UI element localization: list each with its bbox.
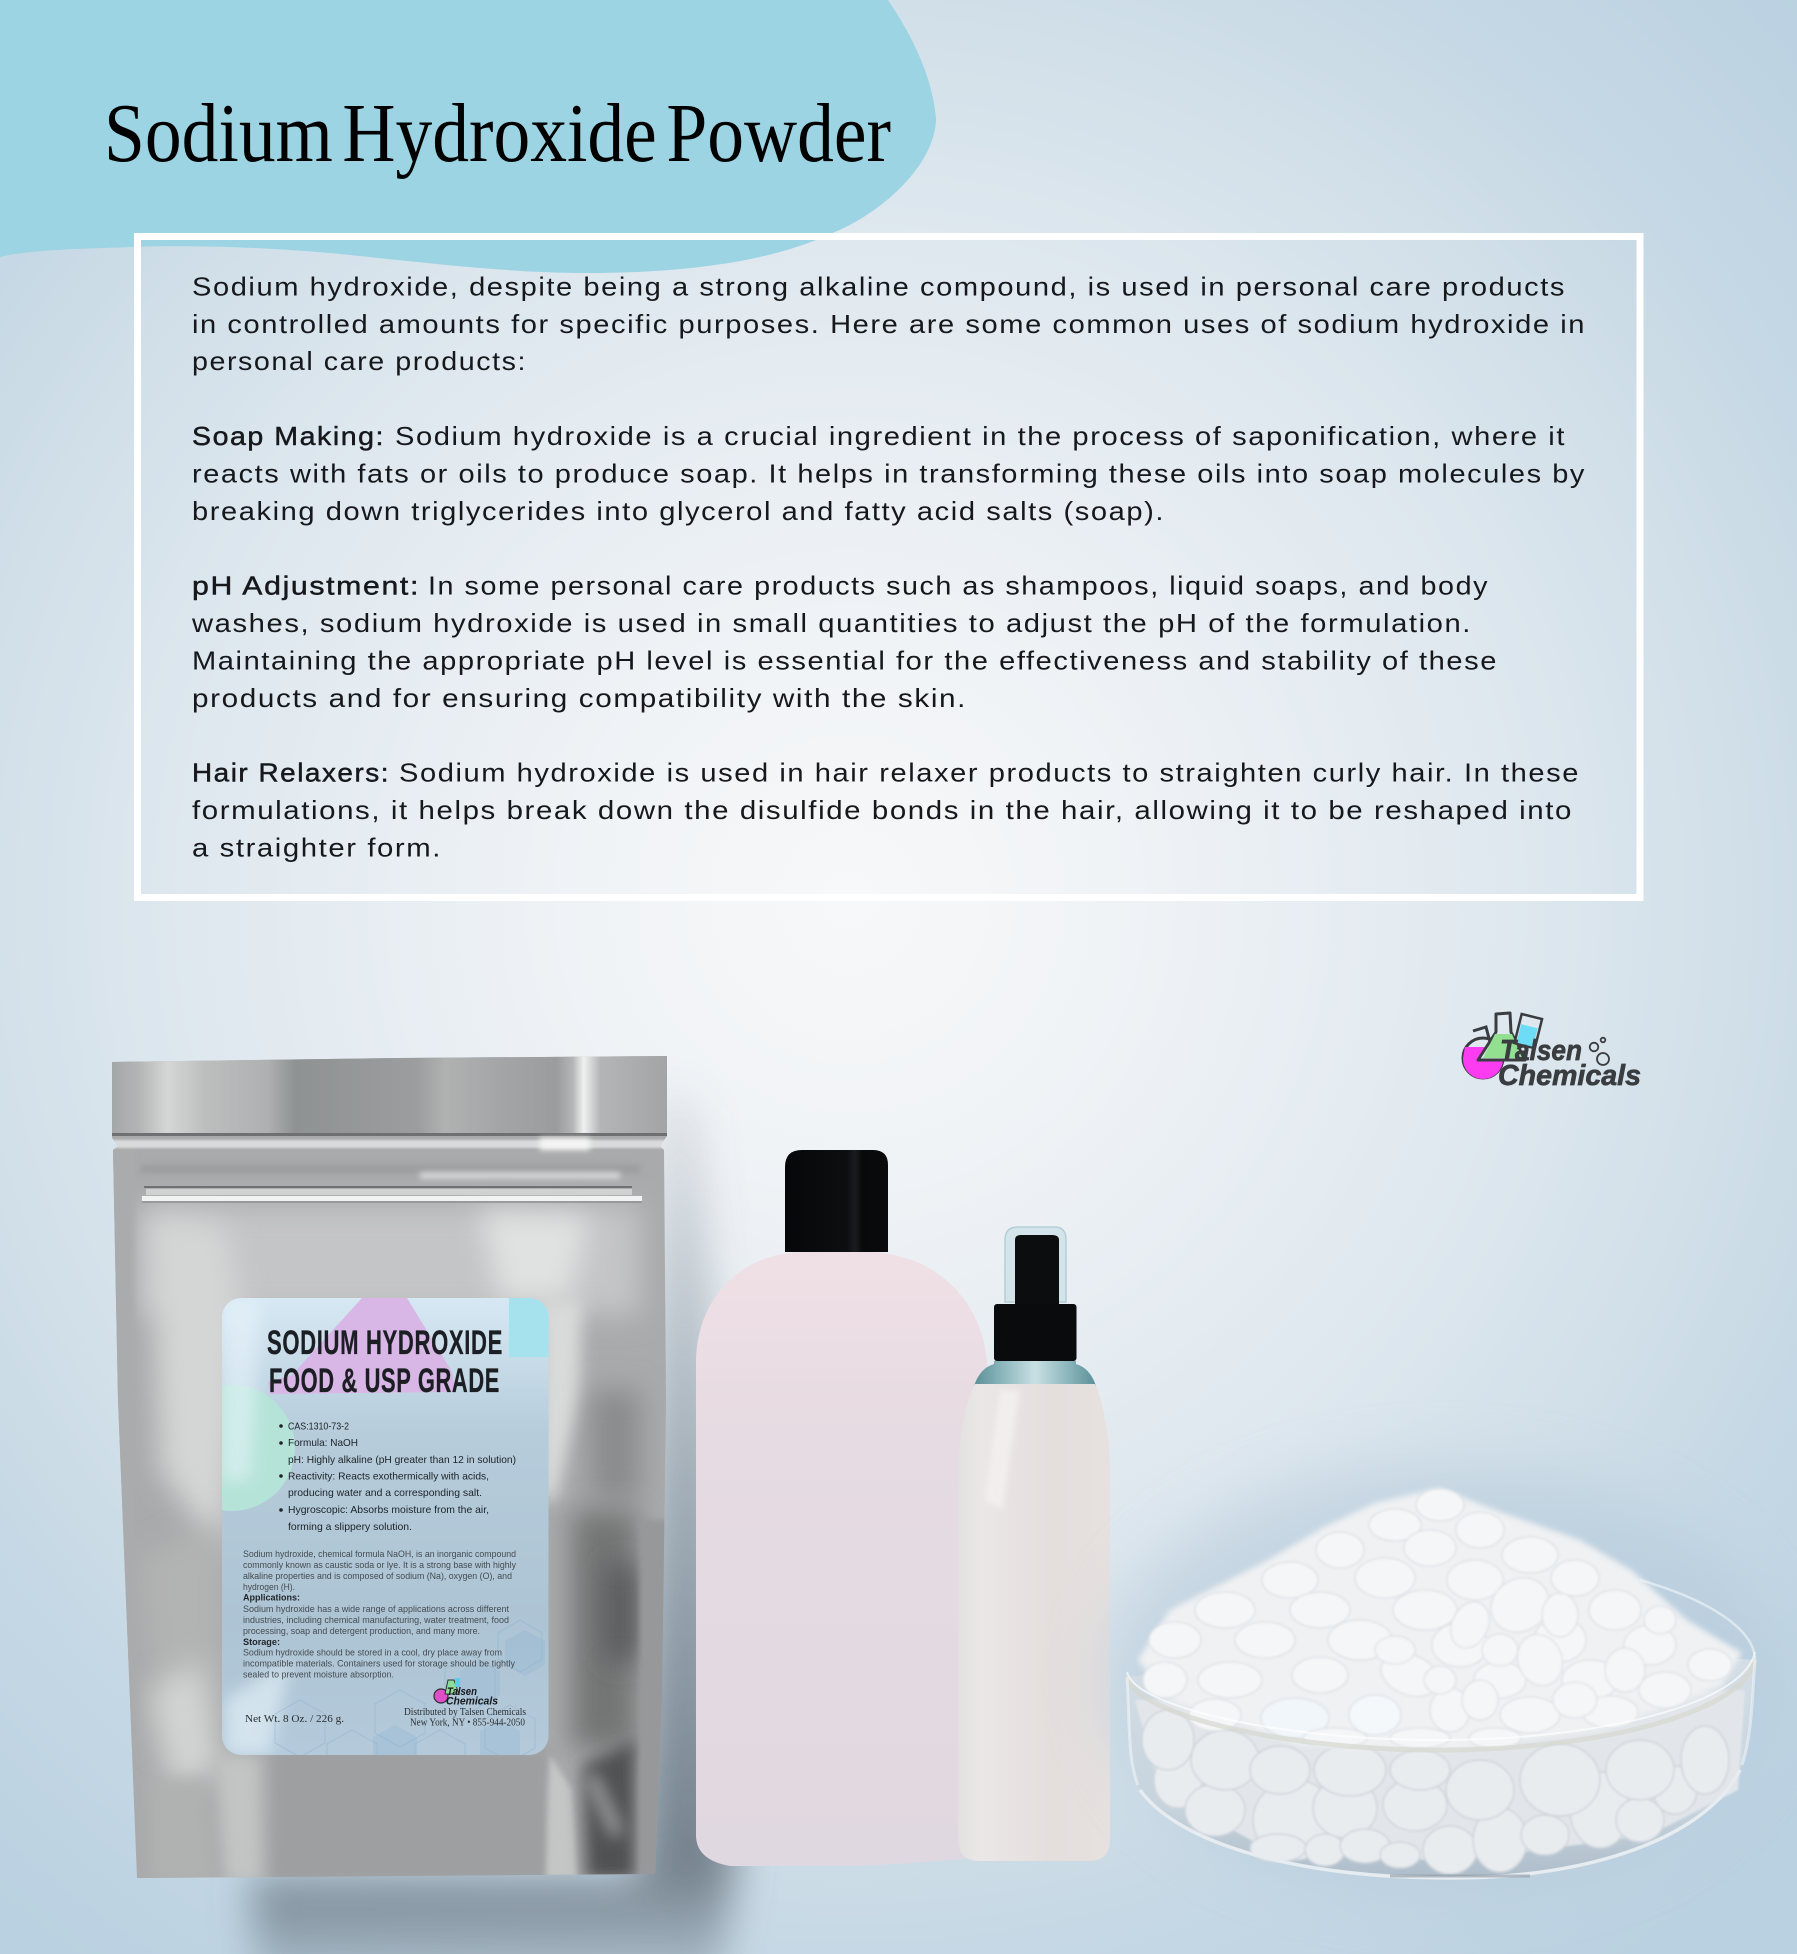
- bottle body: [696, 1252, 987, 1866]
- label heading: FOOD & USP GRADE: [269, 1362, 500, 1400]
- bag shadow: [250, 1085, 735, 1954]
- logo wordmark: [1498, 1035, 1641, 1092]
- intro paragraph: in controlled amounts for specific purposes. Here are some common uses of sodium hydroxide in: [192, 309, 1586, 339]
- pH adjustment paragraph: In some personal care products such as shampoos, liquid soaps, and body: [428, 571, 1489, 601]
- pH adjustment paragraph: [191, 571, 1498, 713]
- foil pouch: [100, 1050, 680, 1890]
- label distributor: New York, NY • 855-944-2050: [410, 1718, 525, 1728]
- icon: conical flask: [1478, 1013, 1525, 1060]
- label bullet list: [279, 1420, 516, 1533]
- spray nozzle: [1015, 1235, 1059, 1304]
- title: Sodium Hydroxide Powder: [104, 87, 891, 180]
- label heading: [267, 1324, 503, 1400]
- intro paragraph: Sodium hydroxide, despite being a strong alkaline compound, is used in personal care products: [192, 272, 1566, 302]
- label small logo: Talsen: [447, 1686, 477, 1698]
- spray clear cap: [1005, 1227, 1066, 1302]
- hair relaxers paragraph: [192, 758, 1580, 862]
- header blob: [0, 0, 936, 273]
- flake pile base: [1138, 1488, 1742, 1750]
- icon: round flask: [1463, 1027, 1503, 1079]
- hair relaxers paragraph: formulations, it helps break down the disulfide bonds in the hair, allowing it to be reshaped into: [192, 795, 1573, 825]
- upper flakes: [1143, 1489, 1732, 1748]
- label description: commonly known as caustic soda or lye. It is a strong base with highly: [243, 1560, 516, 1571]
- icon: bubbles: [1590, 1038, 1609, 1065]
- logo wordmark: Chemicals: [1498, 1060, 1641, 1092]
- glass dish: [1127, 1640, 1755, 1878]
- spray neck: [974, 1361, 1096, 1386]
- label description: Sodium hydroxide has a wide range of applications across different: [243, 1604, 509, 1615]
- label description: industries, including chemical manufacturing, water treatment, food: [243, 1615, 509, 1626]
- soap making paragraph: breaking down triglycerides into glycerol and fatty acid salts (soap).: [192, 496, 1165, 526]
- label description: processing, soap and detergent production, and many more.: [243, 1626, 480, 1637]
- logo: Talsen Chemicals: [1463, 1013, 1641, 1092]
- soap making paragraph: reacts with fats or oils to produce soap. It helps in transforming these oils into soap molecules by: [192, 458, 1586, 488]
- hair relaxers paragraph: a straighter form.: [192, 832, 442, 862]
- soap making paragraph: [192, 421, 1586, 526]
- hair relaxers paragraph: Sodium hydroxide is used in hair relaxer products to straighten curly hair. In these: [399, 758, 1580, 788]
- label description: Storage:: [243, 1637, 280, 1648]
- label bullet list: Reactivity: Reacts exothermically with acids,: [288, 1470, 489, 1482]
- label bullet list: producing water and a corresponding salt.: [288, 1487, 482, 1499]
- glass rim and base highlights: [1127, 1580, 1755, 1878]
- panel border: [138, 236, 1640, 898]
- label description: hydrogen (H).: [243, 1582, 295, 1593]
- intro paragraph: [192, 272, 1586, 376]
- bottle cap: [785, 1150, 888, 1252]
- label bullet list: pH: Highly alkaline (pH greater than 12 in solution): [288, 1454, 516, 1466]
- label small logo: [434, 1678, 498, 1708]
- pH adjustment paragraph: Maintaining the appropriate pH level is essential for the effectiveness and stability of these: [192, 645, 1498, 675]
- label description: incompatible materials. Containers used for storage should be tightly: [243, 1658, 515, 1670]
- label bullet list: Hygroscopic: Absorbs moisture from the air,: [288, 1504, 489, 1516]
- soap making paragraph: Soap Making:: [192, 421, 385, 451]
- spray collar: [994, 1304, 1076, 1361]
- label heading: SODIUM HYDROXIDE: [267, 1324, 503, 1362]
- bowl of sodium hydroxide flakes: [1105, 1465, 1775, 1895]
- spray highlight: [985, 1390, 1020, 1510]
- pH adjustment paragraph: washes, sodium hydroxide is used in small quantities to adjust the pH of the formulation.: [191, 608, 1472, 638]
- large bottle: [696, 1150, 987, 1866]
- label bullet list: CAS:1310-73-2: [288, 1420, 349, 1432]
- label description: Applications:: [243, 1592, 300, 1604]
- label artwork: [222, 1298, 548, 1755]
- label description: [243, 1549, 516, 1680]
- pouch body: [100, 1050, 680, 1890]
- label distributor: [404, 1707, 526, 1728]
- label net weight: Net Wt. 8 Oz. / 226 g.: [245, 1714, 344, 1725]
- label bullet list: forming a slippery solution.: [288, 1521, 412, 1533]
- label bullet list: Formula: NaOH: [288, 1437, 358, 1449]
- product label: [222, 1298, 548, 1755]
- label distributor: Distributed by Talsen Chemicals: [404, 1707, 526, 1718]
- icon: vial: [1514, 1014, 1542, 1048]
- bowl shadow: [1105, 1465, 1775, 1895]
- soap making paragraph: Sodium hydroxide is a crucial ingredient in the process of saponification, where it: [395, 421, 1566, 451]
- label description: Sodium hydroxide should be stored in a cool, dry place away from: [243, 1648, 502, 1658]
- intro paragraph: personal care products:: [192, 346, 527, 376]
- pH adjustment paragraph: products and for ensuring compatibility with the skin.: [192, 683, 967, 713]
- label description: Sodium hydroxide, chemical formula NaOH, is an inorganic compound: [243, 1549, 516, 1560]
- spray bottle: [958, 1227, 1110, 1861]
- lower flakes: [1135, 1690, 1745, 1874]
- label description: sealed to prevent moisture absorption.: [243, 1670, 394, 1680]
- hair relaxers paragraph: Hair Relaxers:: [192, 758, 390, 788]
- logo wordmark: Talsen: [1500, 1035, 1582, 1067]
- label description: alkaline properties and is composed of sodium (Na), oxygen (O), and: [243, 1571, 512, 1582]
- spray body: [958, 1384, 1110, 1861]
- pH adjustment paragraph: pH Adjustment:: [192, 571, 420, 601]
- label small logo: Chemicals: [446, 1696, 498, 1708]
- panel: text box: [138, 236, 1640, 898]
